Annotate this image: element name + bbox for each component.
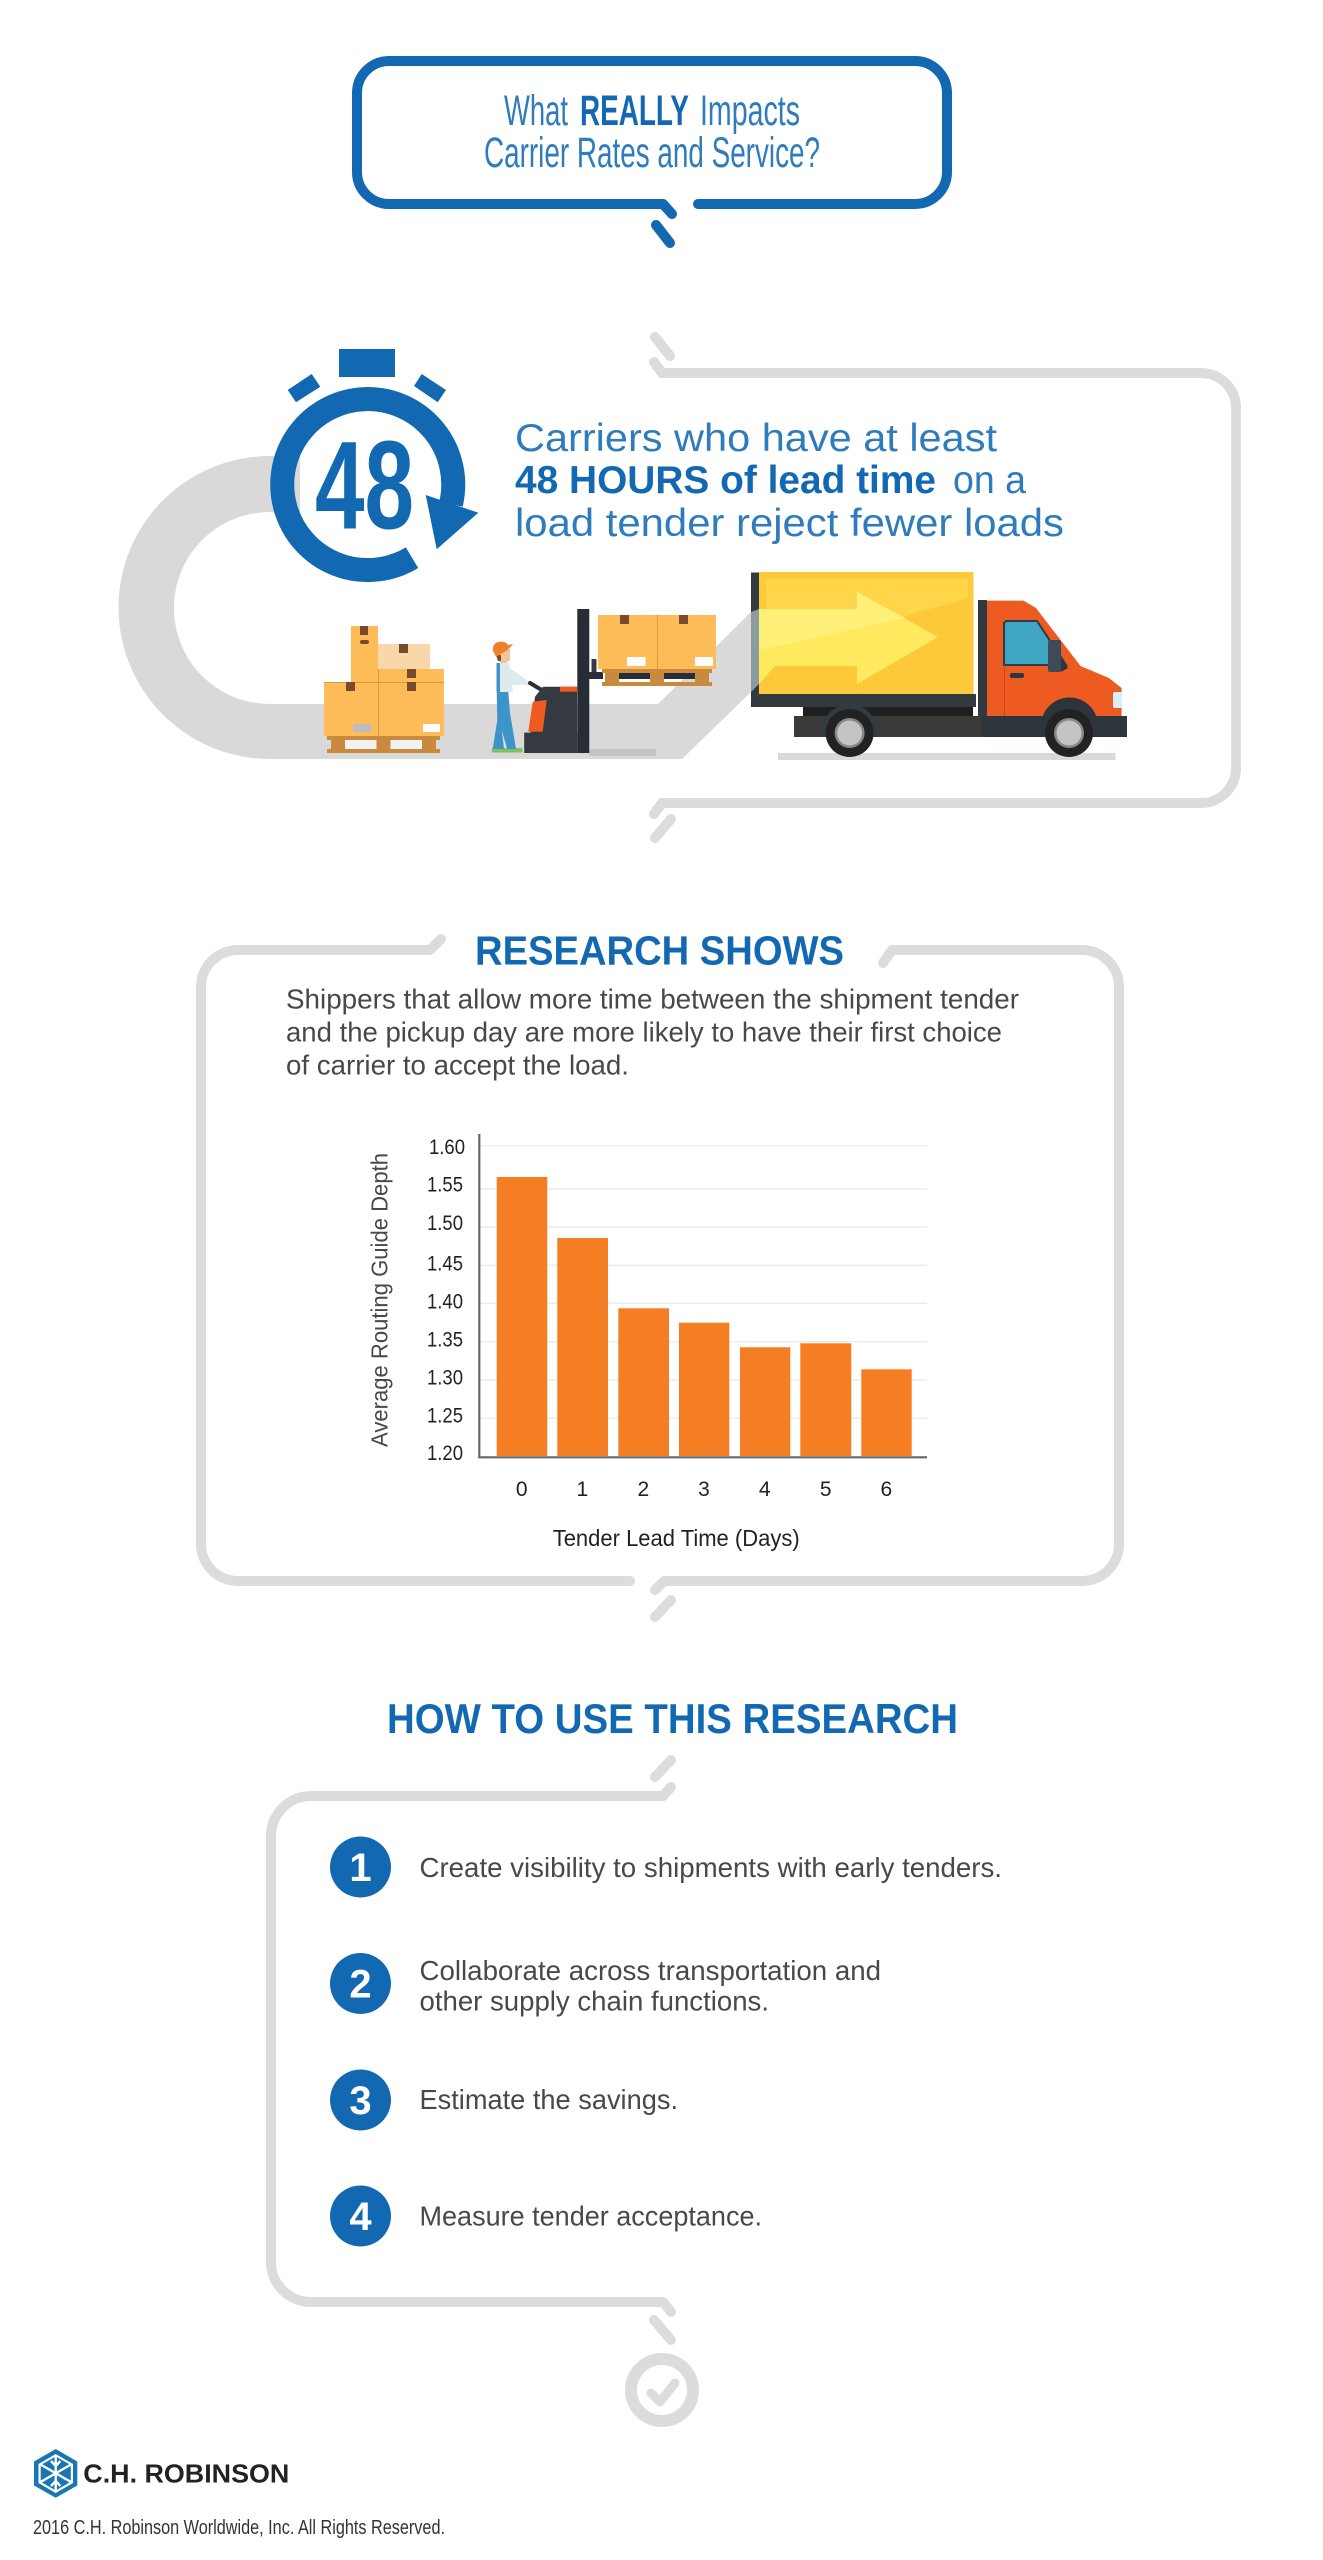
bubble tail: [656, 225, 670, 243]
logo wordmark: C.H. ROBINSON: [83, 2458, 289, 2488]
research text block: and the pickup day are more likely to have their first choice: [286, 1016, 1002, 1048]
x axis title: Tender Lead Time (Days): [553, 1525, 800, 1551]
panel: 48 hours lead time: [119, 337, 1236, 838]
step 1: 1: [349, 1846, 372, 1890]
step 2: Collaborate across transportation and: [420, 1955, 881, 1986]
title text: Impacts: [700, 87, 800, 135]
stacked boxes on pallet: [324, 626, 444, 753]
delivery truck: [751, 572, 1127, 760]
step 4: Measure tender acceptance.: [420, 2200, 762, 2232]
research text block: [286, 984, 1019, 1080]
lead time statement: on a: [953, 459, 1026, 502]
icon: check mark circle: [631, 2359, 693, 2421]
panel frame: [201, 939, 1119, 1617]
copyright line: 2016 C.H. Robinson Worldwide, Inc. All Rights Reserved.: [33, 2517, 445, 2539]
y axis values: [427, 1136, 465, 1465]
step 1: [330, 1836, 1002, 1898]
y axis title: Average Routing Guide Depth: [366, 1153, 392, 1447]
step 3: 3: [349, 2079, 372, 2123]
y axis values: 1.60: [429, 1136, 465, 1159]
y axis values: 1.55: [427, 1174, 463, 1197]
title text: What: [504, 87, 568, 135]
step 4: 4: [349, 2195, 372, 2239]
step 2: 2: [349, 1962, 372, 2006]
research text block: of carrier to accept the load.: [286, 1050, 629, 1080]
grey road shape: [119, 456, 751, 759]
y axis values: 1.45: [427, 1253, 463, 1276]
step 3: Estimate the savings.: [420, 2084, 678, 2115]
lead time statement: [515, 417, 1064, 545]
step 4: [330, 2186, 762, 2246]
panel: how to use this research: [271, 1695, 1002, 2421]
x axis values: [516, 1478, 892, 1501]
icon: 48 hour stopwatch: 48: [315, 416, 414, 556]
icon: C.H. Robinson hexagon: [34, 2449, 77, 2498]
x axis values: 2: [637, 1478, 649, 1501]
connector frame: [654, 337, 1236, 838]
y axis values: 1.25: [427, 1405, 463, 1428]
footer logo: [34, 2449, 289, 2498]
x axis values: 5: [820, 1478, 832, 1501]
title text: Carrier Rates and Service?: [484, 129, 820, 177]
title text: [484, 87, 820, 177]
panel: research shows: [201, 928, 1119, 1617]
x axis values: 3: [698, 1478, 710, 1501]
y axis values: 1.35: [427, 1329, 463, 1352]
step 3: [330, 2070, 678, 2130]
chart axes: [479, 1134, 927, 1457]
step 2: other supply chain functions.: [420, 1986, 769, 2016]
step 2: [330, 1953, 881, 2016]
step 1: Create visibility to shipments with early tenders.: [420, 1852, 1002, 1883]
chart grid lines: [480, 1146, 927, 1418]
x axis values: 4: [759, 1478, 771, 1501]
x axis values: 0: [516, 1478, 528, 1501]
x axis values: 1: [576, 1478, 588, 1501]
title speech bubble: [357, 61, 947, 243]
lead time statement: 48 HOURS of lead time: [515, 459, 936, 502]
chart bars: [497, 1177, 912, 1456]
heading: HOW TO USE THIS RESEARCH: [387, 1695, 958, 1742]
bubble outline: [357, 61, 947, 214]
y axis values: 1.30: [427, 1366, 463, 1389]
worker: [492, 642, 529, 752]
icon: 48 hour stopwatch: [282, 349, 478, 570]
lead time statement: Carriers who have at least: [515, 417, 997, 460]
heading: RESEARCH SHOWS: [475, 928, 844, 974]
panel frame: [271, 1760, 671, 2340]
y axis values: 1.20: [427, 1442, 463, 1465]
research text block: Shippers that allow more time between the shipment tender: [286, 984, 1019, 1014]
lead time statement: load tender reject fewer loads: [515, 502, 1064, 545]
y axis values: 1.50: [427, 1212, 463, 1235]
forklift: [524, 609, 656, 756]
y axis values: 1.40: [427, 1291, 463, 1314]
title text: REALLY: [580, 87, 689, 135]
bar chart: [366, 1134, 927, 1551]
x axis values: 6: [880, 1478, 892, 1501]
raised boxes on forks: [598, 615, 716, 686]
